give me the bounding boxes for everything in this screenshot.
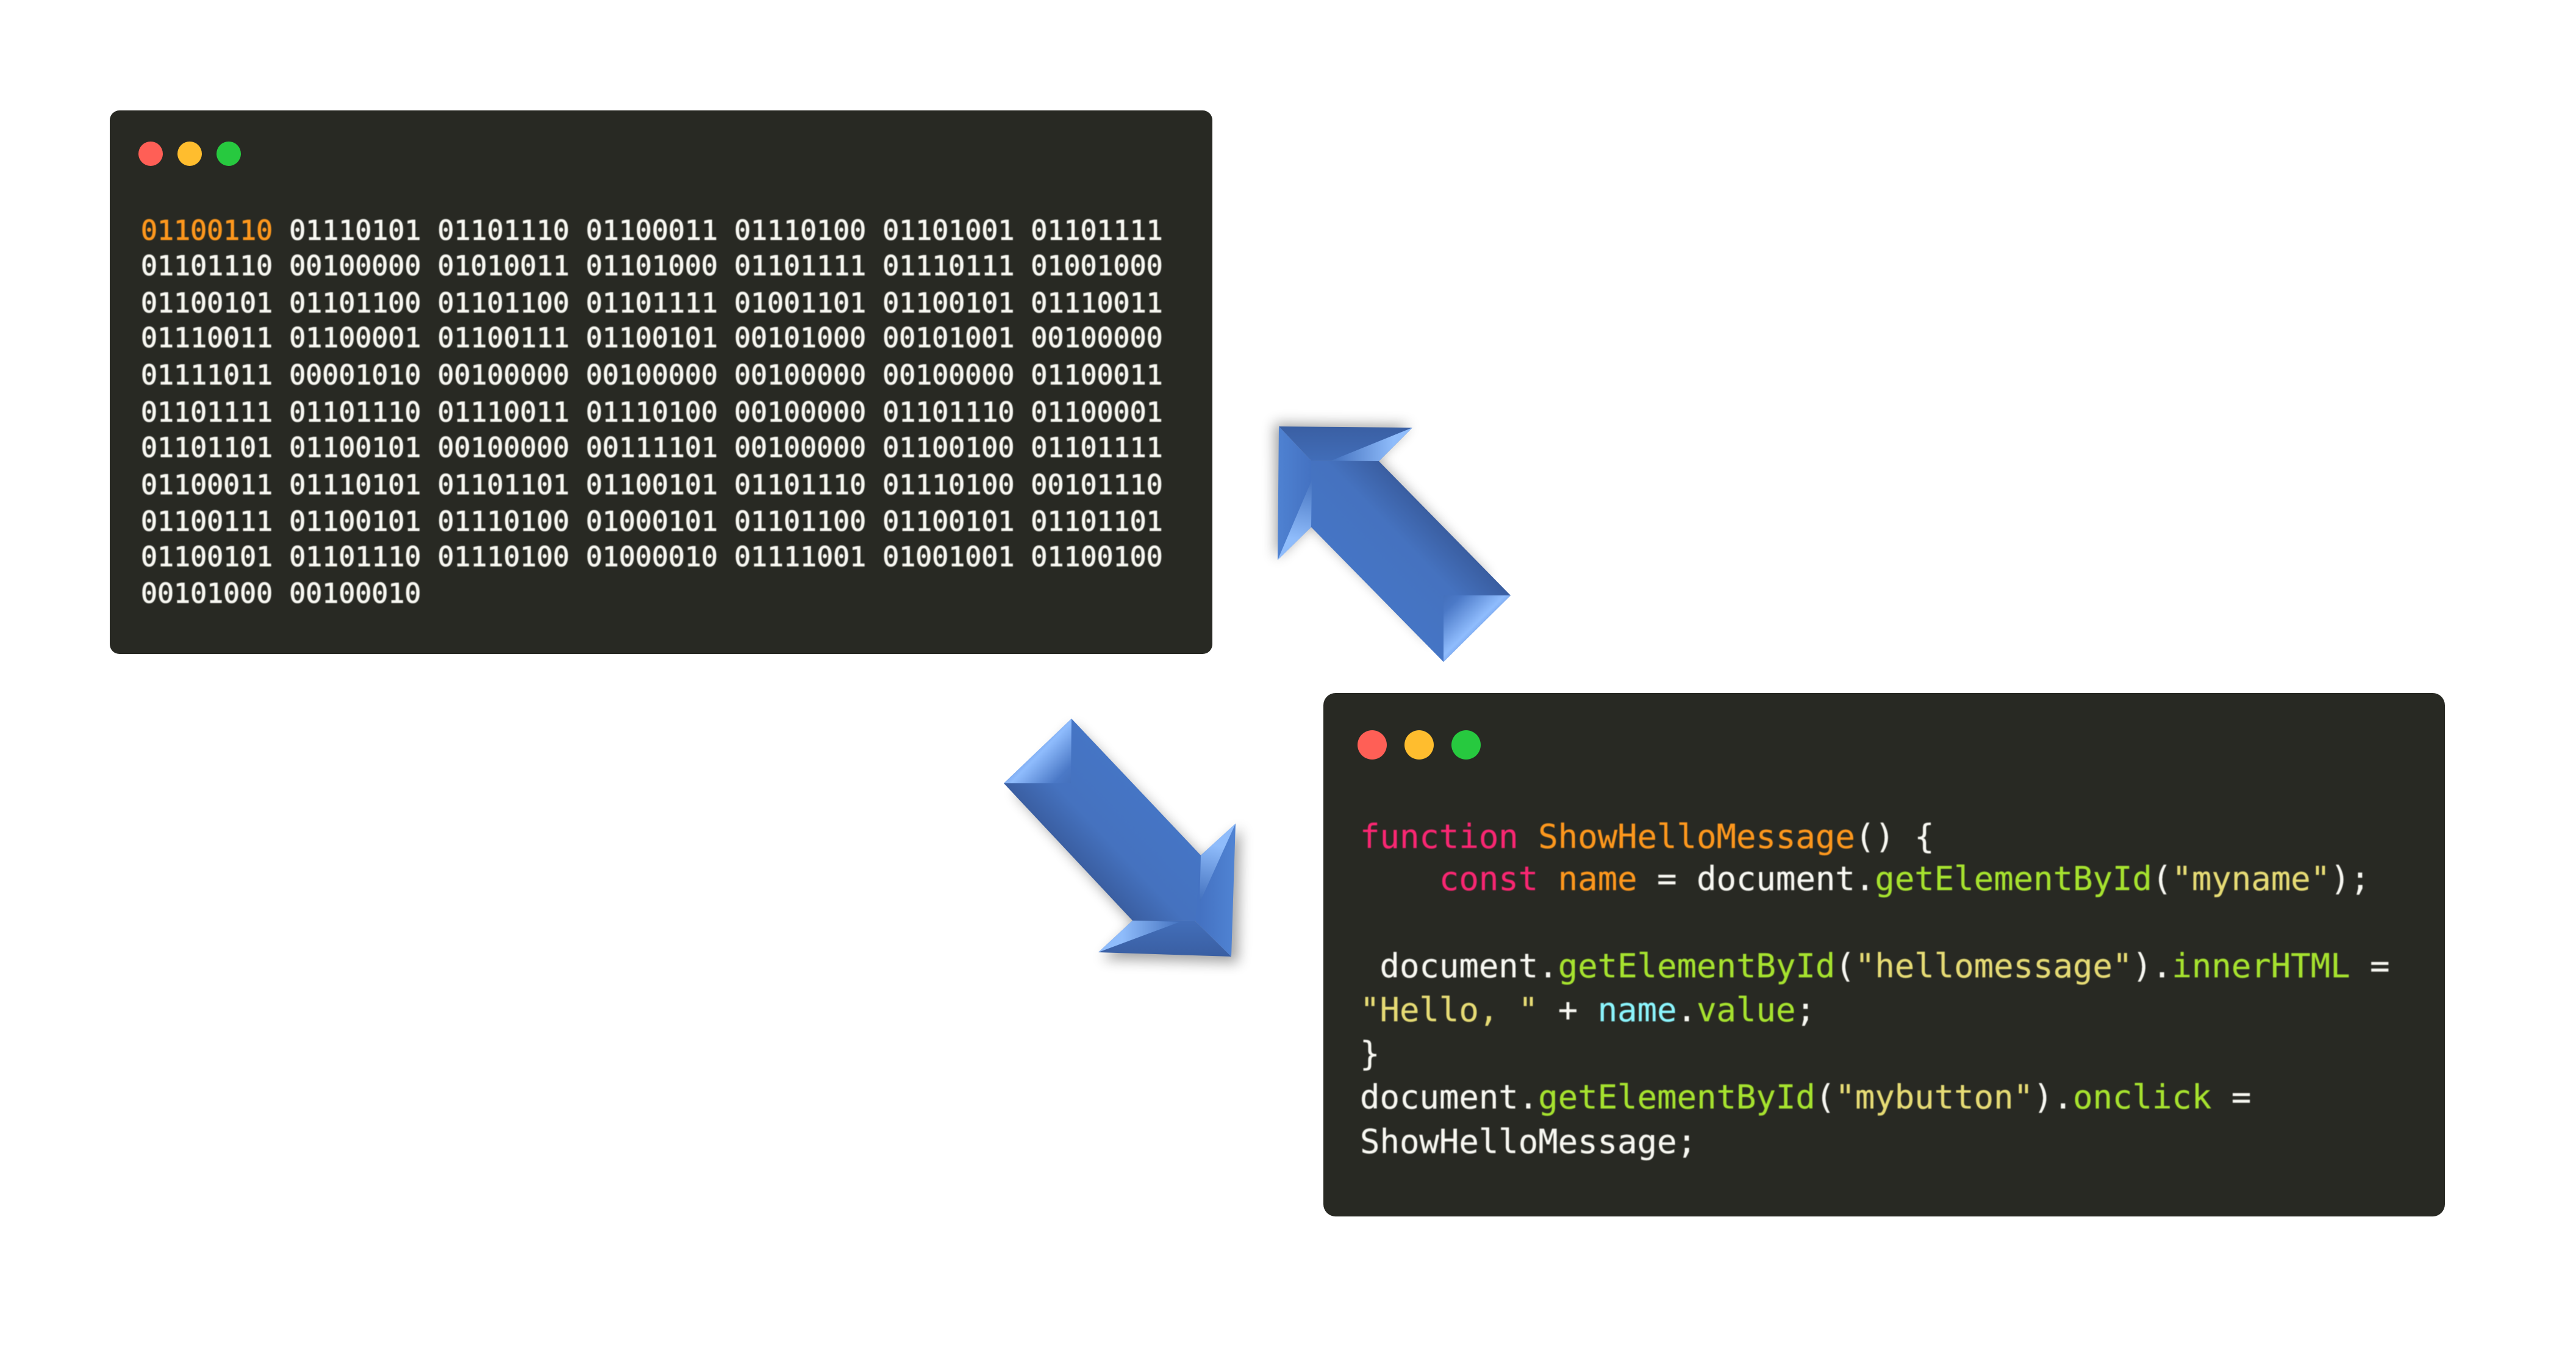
binary text: 01101110 00100000 01010011 01101000 01101111 01110111 01001000 bbox=[141, 250, 1163, 282]
arrow: down-right, binary to source code bbox=[1004, 719, 1240, 963]
JavaScript code: ShowHelloMessage; bbox=[1360, 1122, 1697, 1161]
binary text: 01100111 01100101 01110100 01000101 01101100 01100101 01101101 bbox=[141, 505, 1163, 537]
JavaScript code: function ShowHelloMessage() { bbox=[1360, 817, 1934, 856]
JavaScript code: "Hello, " + name.value; bbox=[1360, 991, 1816, 1029]
binary text: 01111011 00001010 00100000 00100000 00100000 00100000 01100011 bbox=[141, 359, 1163, 391]
arrow: up-left, source code to binary bbox=[1275, 423, 1511, 662]
window controls bbox=[1358, 730, 1481, 760]
window background bbox=[110, 110, 1212, 654]
panel: source code window bbox=[1323, 693, 2445, 1216]
binary text: 01100011 01110101 01101101 01100101 01101110 01110100 00101110 bbox=[141, 469, 1163, 501]
JavaScript code: } bbox=[1360, 1035, 1379, 1073]
window controls bbox=[138, 142, 241, 166]
binary text: 01110011 01100001 01100111 01100101 00101000 00101001 00100000 bbox=[141, 321, 1163, 354]
binary text: 01101111 01101110 01110011 01110100 00100000 01101110 01100001 bbox=[141, 396, 1163, 428]
JavaScript code bbox=[1360, 817, 2390, 1161]
JavaScript code: const name = document.getElementById("myname"); bbox=[1360, 860, 2370, 898]
binary text: 01100101 01101110 01110100 01000010 01111001 01001001 01100100 bbox=[141, 541, 1163, 573]
binary text: 00101000 00100010 bbox=[141, 577, 421, 609]
binary text bbox=[141, 214, 1163, 609]
window background bbox=[1323, 693, 2445, 1216]
binary text: 01100101 01101100 01101100 01101111 01001101 01100101 01110011 bbox=[141, 287, 1163, 319]
binary text: 01101101 01100101 00100000 00111101 00100000 01100100 01101111 bbox=[141, 431, 1163, 464]
binary text: 01100110 01110101 01101110 01100011 01110100 01101001 01101111 bbox=[141, 214, 1163, 246]
JavaScript code: document.getElementById("hellomessage").innerHTML = bbox=[1360, 947, 2390, 985]
panel: binary code window bbox=[110, 110, 1212, 654]
JavaScript code: document.getElementById("mybutton").onclick = bbox=[1360, 1078, 2251, 1116]
